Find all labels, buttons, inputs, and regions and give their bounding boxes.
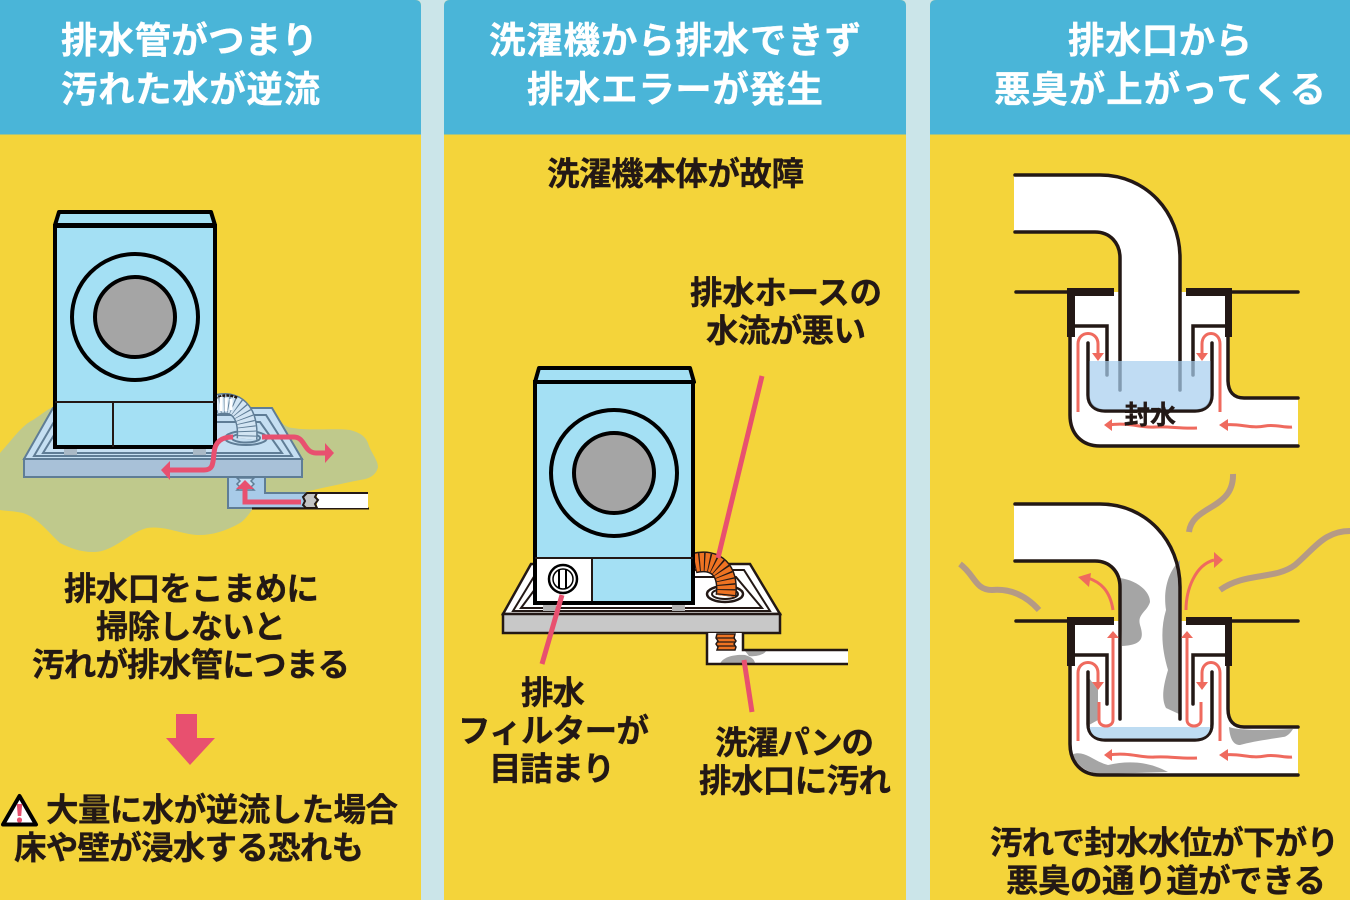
text block: cleaning advice [32,571,350,683]
label: pan drain: 排水口に汚れ [699,763,891,799]
header band [444,0,906,134]
text block: cleaning advice: 排水口をこまめに [64,571,319,607]
washing machine [535,368,694,603]
broken pipe clog [303,493,318,508]
heading: 排水エラーが発生 [527,69,823,110]
label: sealing water: 封水 [1124,400,1176,430]
orange hose [694,562,743,602]
label: filter: 目詰まり [489,751,615,787]
pipe [1014,175,1180,292]
icon: warning [3,796,36,824]
leader lines [542,376,762,712]
diagram: dirty trap [960,474,1350,775]
trap outlines [1015,504,1298,775]
trap outlines [1015,175,1298,446]
heading: 洗濯機から排水できず [489,20,861,61]
drain trap [707,633,848,664]
trap collar [1067,617,1232,666]
panel: backflow [0,0,421,900]
panel background [0,0,421,900]
panel background [930,0,1350,900]
text block: conclusion [990,824,1339,899]
heading: 排水管がつまり [61,20,318,61]
puddle [0,407,378,552]
label: filter: フィルターが [458,712,649,749]
washing pan [503,564,780,633]
heading: 悪臭が上がってくる [994,69,1326,110]
heading: 汚れた水が逆流 [61,69,320,110]
text block: warning [14,791,398,866]
trap collar [1067,288,1232,337]
label: pan drain [699,725,891,799]
panel: drain error [444,0,906,900]
arrows: overflow flow [161,437,334,502]
text block: conclusion: 悪臭の通り道ができる [1006,862,1326,899]
label: pan drain: 洗濯パンの [715,725,874,761]
washing machine tray [24,408,302,477]
label: hose: 水流が悪い [706,312,866,349]
text block: warning: 大量に水が逆流した場合 [46,791,398,828]
sealing water [1090,361,1210,410]
heading: 排水口から [1068,20,1252,61]
grime [720,655,755,664]
trap interior [1070,292,1298,446]
heading [994,20,1326,110]
label: hose: 排水ホースの [690,275,882,311]
label: filter [458,675,649,787]
text block: cleaning advice: 掃除しないと [96,609,286,645]
panel: odor [930,0,1350,900]
text block: cleaning advice: 汚れが排水管につまる [32,646,350,683]
red flow arrows [1078,552,1292,761]
heading [489,20,861,110]
subheading: 洗濯機本体が故障 [547,155,804,192]
washing machine [55,212,215,447]
label: hose [690,275,882,349]
ribbed drain hose [237,478,254,490]
pipe [1014,504,1180,621]
label: filter: 排水 [521,675,585,711]
arrow: down [166,714,215,765]
red flow arrows [1078,334,1292,431]
drain hose [215,396,267,445]
header band [930,0,1350,134]
heading [61,20,320,110]
grime stains [1073,560,1293,774]
trap interior [1070,621,1298,775]
panel background [444,0,906,900]
lowered water [1090,724,1210,738]
ribbed hose [716,634,736,650]
drain pipe [228,477,369,508]
text block: warning: 床や壁が浸水する恐れも [14,829,364,866]
odor wisps [960,474,1350,610]
header band [0,0,421,134]
text block: conclusion: 汚れで封水水位が下がり [990,824,1339,861]
diagram: healthy trap [1014,175,1298,446]
